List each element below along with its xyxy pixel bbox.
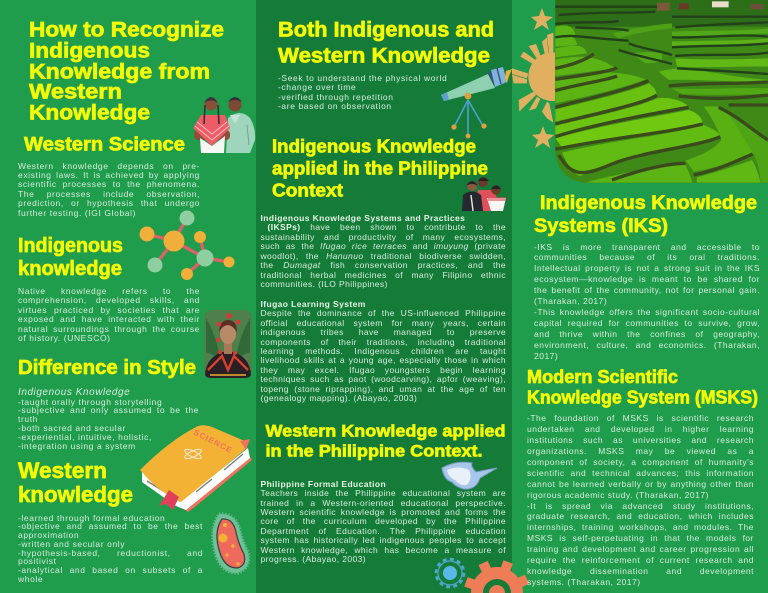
text block: Ifugao learning system: topeng (stone riprapping), and uman at the age of ten [260, 384, 506, 394]
text block: western science: further testing. (IGI Global) [18, 208, 136, 218]
heading: Modern Scientific Knowledge System (MSKS): Knowledge System (MSKS) [527, 388, 758, 408]
icon: portrait of indigenous woman [204, 310, 252, 378]
text block: IKSPs: such as the Ifugao rice terraces and imuyung (private [260, 241, 506, 251]
heading: Both Indigenous and Western Knowledge: Both Indigenous and [278, 18, 494, 42]
text block: IKS description [534, 242, 760, 361]
text block: western knowledge list: -analytical and based on subsets of a [18, 565, 203, 575]
text block: MSKS description: MSKS is self-perpetuating in that the models for [527, 533, 754, 543]
text block: MSKS description: undertaken and developed in higher learning [527, 424, 754, 434]
text block: indigenous knowledge: exposed and have interacted with their [18, 314, 200, 324]
text block: western science: prediction, or hypothesis that undergo [18, 198, 200, 208]
text block: western knowledge list: -learned through formal education [18, 512, 165, 522]
icon: two indigenous people [193, 97, 255, 153]
text block: shared traits list: -change over time [278, 82, 356, 92]
text block: MSKS description: -The foundation of MSKS is scientific research [527, 413, 754, 423]
text block: IKSPs [260, 212, 506, 289]
text block: western knowledge list: -hypothesis-based, reductionist, and [18, 548, 203, 558]
text block: IKS description: 2017) [534, 351, 558, 361]
icon: small blue gear [436, 559, 464, 587]
text block: indigenous knowledge style list [18, 386, 199, 451]
icon: cell [213, 514, 249, 573]
text block: indigenous knowledge style list: -taught orally through storytelling [18, 396, 162, 406]
heading: Western Science: Western Science [24, 134, 185, 156]
text block: IKS description: communities because of its oral traditions. [534, 252, 760, 262]
text block: IKS description: -IKS is more transparent and accessible to [534, 242, 760, 252]
text block: MSKS description: training and development and career progression all [527, 544, 754, 554]
text block: indigenous knowledge [18, 286, 200, 343]
text block: indigenous knowledge style list: -subjective and only assumed to be the [18, 405, 199, 415]
text block: indigenous knowledge style list: -both sacred and secular [18, 423, 126, 433]
text block: western knowledge list: approximation [18, 530, 79, 540]
text block: Ifugao learning system: techniques such as paot (woodcarving), apfor (weaving), [260, 374, 506, 384]
text block: indigenous knowledge style list: truth [18, 414, 38, 424]
text block: IKSPs: traditional herbal medicines of many Filipino ethnic [260, 270, 506, 280]
text block: Ifugao learning system: (genealogy mapping). (Abayao, 2003) [260, 393, 417, 403]
text block: western science: existing laws. It is achieved by applying [18, 170, 200, 180]
text block: MSKS description: systems. (Tharakan, 2017) [527, 577, 641, 587]
text block: Ifugao learning system: official educational system for many years, certain [260, 318, 506, 328]
heading: Modern Scientific Knowledge System (MSKS) [527, 367, 758, 408]
text block: indigenous knowledge style list: Indigenous Knowledge [18, 386, 130, 398]
text block: IKS description: (Tharakan, 2017) [534, 296, 607, 306]
text block: Ifugao learning system: Ifugao Learning System [260, 299, 366, 309]
text block: Philippine formal education: Western scientific knowledge is promoted and forms the [260, 507, 506, 517]
icon: science book: SCIENCE [192, 428, 234, 455]
text block: Philippine formal education: progress. (Abayao, 2003) [260, 554, 366, 564]
title: Knowledge [29, 102, 150, 124]
text block: MSKS description [527, 413, 754, 587]
heading: Western knowledge: Western [18, 458, 107, 483]
icon: filipino family [462, 177, 506, 211]
text block: IKS description: Intellectual property is not a strong suit in the IKS [534, 263, 760, 273]
text block: MSKS description: rigorous academic study. (Tharakan, 2017) [527, 490, 709, 500]
text block: indigenous knowledge style list: -experiential, intuitive, holistic, [18, 432, 152, 442]
text block: Philippine formal education: trained in a Western-oriented educational perspective. [260, 498, 506, 508]
text block: indigenous knowledge style list: -integration using a system [18, 441, 136, 451]
text block: Ifugao learning system: learning methods. Indigenous children are taught [260, 346, 506, 356]
heading: Indigenous Knowledge applied in the Philippine Context: applied in the Philippine [272, 158, 488, 178]
text block: western knowledge list: positivist [18, 556, 57, 566]
text block: IKSPs: Indigenous Knowledge Systems and Practices [260, 212, 465, 222]
text block: IKS description: -This knowledge offers the significant socio-cultural [534, 307, 760, 317]
heading: Indigenous Knowledge Systems (IKS): Indigenous Knowledge [540, 192, 757, 214]
text block: shared traits list: -Seek to understand the physical world [278, 73, 447, 83]
text block: MSKS description: institutions such as universities and research [527, 435, 754, 445]
heading: Indigenous Knowledge Systems (IKS): Systems (IKS) [534, 215, 668, 237]
text block: MSKS description: scientific and technical advances; this information [527, 468, 754, 478]
icon: safety goggles [442, 462, 497, 489]
heading: Indigenous knowledge: knowledge [18, 258, 122, 280]
text block: IKS description: environment, culture, and economics. (Tharakan, [534, 340, 760, 350]
text block: IKSPs: sustainability and productivity of many ecosystems, [260, 232, 506, 242]
title: How to Recognize [29, 18, 224, 42]
title: Knowledge from [29, 60, 210, 84]
heading: Difference in Style: Difference in Style [18, 357, 196, 379]
text block: IKSPs: the Dumagat fish conservation practices, and the [260, 260, 506, 270]
icon: philippine sun and stars [512, 8, 555, 148]
text block: IKSPs: woodlot), the Hanunuo traditional biodiverse swidden, [260, 250, 506, 260]
icon: molecule [140, 210, 234, 280]
heading: Indigenous Knowledge applied in the Philippine Context [272, 136, 488, 200]
text block: IKSPs: (IKSPs) have been shown to contribute to the [268, 222, 506, 232]
text block: western knowledge list: -objective and assumed to be the best [18, 521, 203, 531]
text block: western knowledge list [18, 512, 203, 584]
heading: Both Indigenous and Western Knowledge [278, 18, 494, 68]
heading: Western knowledge [18, 458, 133, 507]
heading: Western knowledge: knowledge [18, 482, 133, 507]
heading: Indigenous Knowledge Systems (IKS) [534, 192, 757, 237]
text block: Philippine formal education: Teachers inside the Philippine educational system are [260, 488, 506, 498]
title: Western [29, 80, 122, 104]
panel: middle column background [256, 0, 512, 593]
text block: indigenous knowledge: natural surroundings through the course [18, 324, 200, 334]
heading: Western Knowledge applied in the Philippine Context: Western Knowledge applied [266, 422, 506, 440]
text block: Ifugao learning system: livelihood skills at a young age, especially those in which [260, 355, 506, 365]
text block: indigenous knowledge: comprehension, developed skills, and [18, 295, 200, 305]
text block: MSKS description: cannot be learned verbally or by anything other than [527, 479, 754, 489]
heading: Indigenous Knowledge applied in the Philippine Context: Indigenous Knowledge [272, 136, 476, 156]
text block: Ifugao learning system: they may excel. Ifugao youngsters begin learning [260, 365, 506, 375]
icon: science book [140, 425, 252, 512]
icon: large orange gear [464, 560, 529, 593]
text block: shared traits list: -are based on observation [278, 101, 392, 111]
title: Indigenous [29, 40, 150, 62]
text block: Philippine formal education: Philippine Formal Education [260, 479, 386, 489]
text block: western science: The processes include observation, [18, 189, 200, 199]
heading: Both Indigenous and Western Knowledge: Western Knowledge [278, 44, 490, 68]
text block: Philippine formal education: Western knowledge, which has become a measure of [260, 545, 506, 555]
heading: Western Knowledge applied in the Philippine Context: in the Philippine Context. [266, 442, 482, 460]
text block: Philippine formal education [260, 479, 506, 564]
text block: Ifugao learning system [260, 299, 506, 403]
title [29, 18, 224, 124]
heading: Modern Scientific Knowledge System (MSKS): Modern Scientific [527, 367, 678, 387]
text block: MSKS description: organizations. MSKS may be viewed as a [527, 446, 754, 456]
text block: Ifugao learning system: indigenous tribes have managed to preserve [260, 327, 506, 337]
text block: indigenous knowledge: virtues practiced by societies that are [18, 305, 200, 315]
text block: IKS description: and thrive within the confines of geography, [534, 329, 760, 339]
text block: IKS description: capital required for communities to survive, grow, [534, 318, 760, 328]
photo: rice terraces [555, 0, 768, 183]
text block: Philippine formal education: system has historically led indigenous peoples to accept [260, 535, 506, 545]
text block: MSKS description: knowledge dissemination and development [527, 566, 754, 576]
heading: Indigenous Knowledge applied in the Philippine Context: Context [272, 180, 343, 200]
text block: western science: scientific processes to the phenomena. [18, 179, 200, 189]
text block: indigenous knowledge: Native knowledge refers to the [18, 286, 200, 296]
text block: western science: Western knowledge depends on pre- [18, 160, 200, 170]
text block: Philippine formal education: core of the curriculum developed by the Philippine [260, 516, 506, 526]
text block: shared traits list [278, 73, 447, 111]
text block: MSKS description: graduate research, and education, which includes [527, 511, 754, 521]
text block: Ifugao learning system: components of their traditions, including traditional [260, 337, 506, 347]
text block: Ifugao learning system: Despite the dominance of the US-influenced Philippine [260, 308, 506, 318]
heading: Western Knowledge applied in the Philippine Context [266, 422, 506, 460]
text block: shared traits list: -verified through repetition [278, 92, 394, 102]
text block: MSKS description: component of society, a component of humanity's [527, 457, 754, 467]
text block: IKS description: the benefit of the community, not for personal gain. [534, 285, 760, 295]
text block: Philippine formal education: Department of Education. The Philippine education [260, 526, 506, 536]
text block: indigenous knowledge: of history. (UNESCO) [18, 333, 111, 343]
text block: MSKS description: require the reinforcement of current research and [527, 555, 754, 565]
text block: MSKS description: -It is spread via advanced study institutions, [527, 501, 754, 511]
icon: telescope [441, 67, 512, 138]
heading: Indigenous knowledge: Indigenous [18, 235, 123, 257]
text block: western knowledge list: -written and secular only [18, 539, 125, 549]
text block: MSKS description: internships, training workshops, and modules. The [527, 522, 754, 532]
text block: IKSPs: communities. (ILO Philippines) [260, 279, 388, 289]
text block: western knowledge list: whole [18, 574, 43, 584]
text block: IKS description: ecosystem—knowledge is meant to be shared for [534, 274, 760, 284]
text block: western science [18, 160, 200, 218]
heading: Indigenous knowledge [18, 235, 123, 280]
